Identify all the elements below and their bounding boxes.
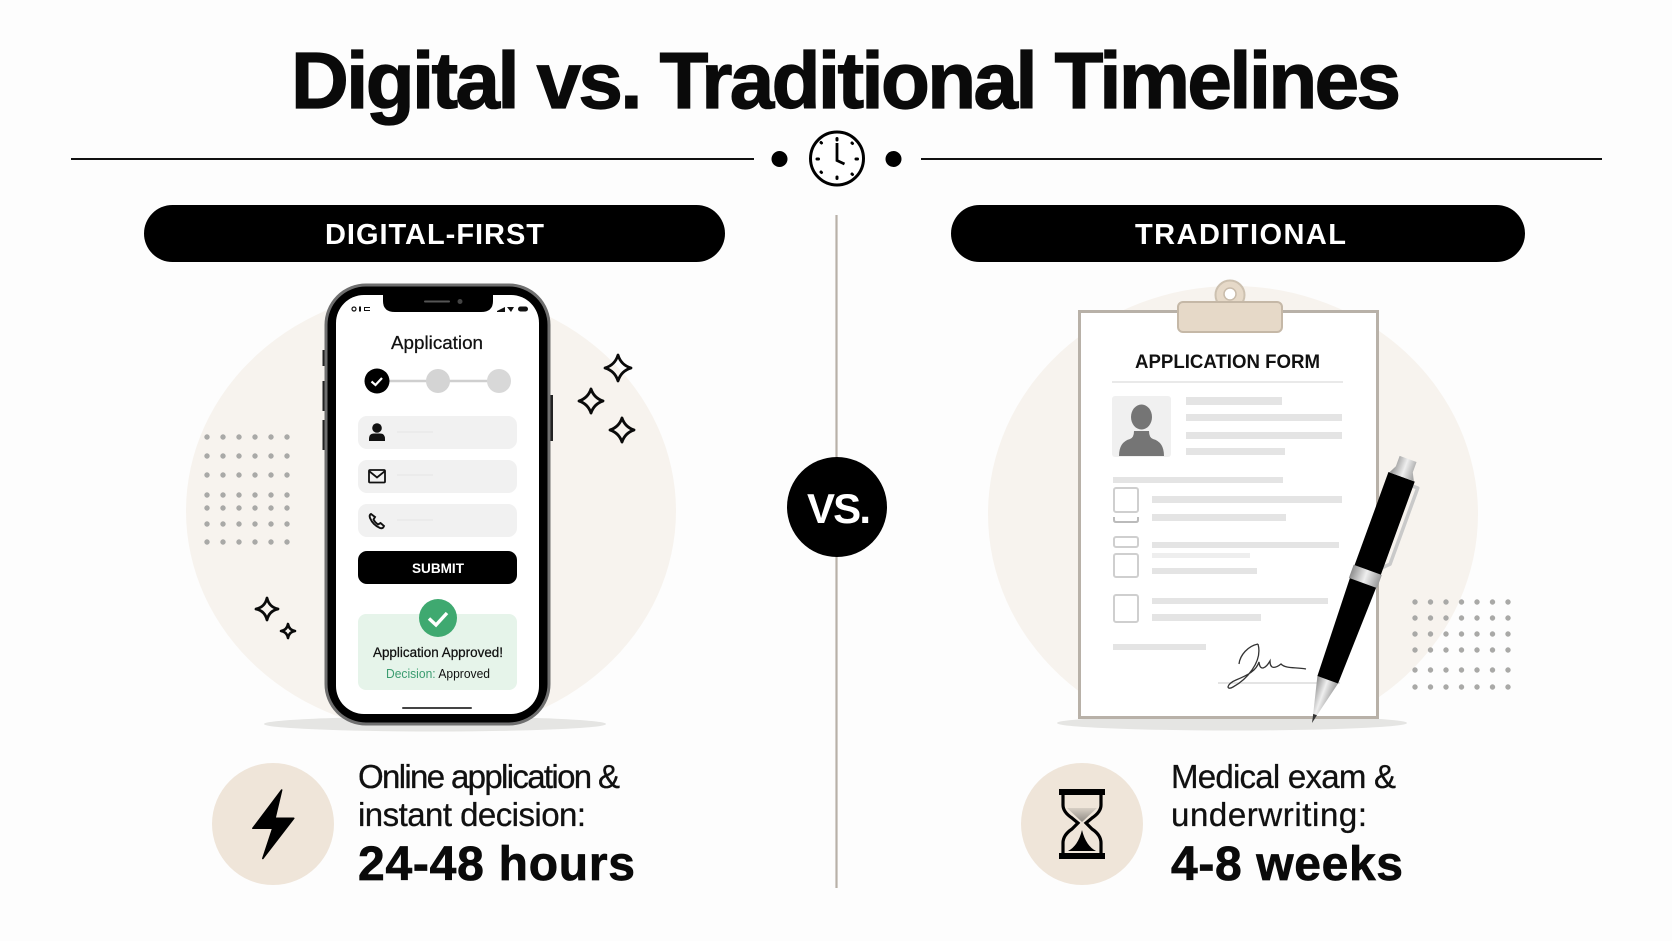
paper: [1080, 312, 1378, 718]
form title: APPLICATION FORM: [1135, 351, 1320, 373]
phone screen: [336, 295, 539, 714]
stat text: 4-8 weeks: [1171, 838, 1403, 891]
submit button: [358, 551, 517, 584]
clipboard form: [1080, 280, 1378, 718]
header divider with clock: [71, 132, 1602, 185]
notch speaker: [424, 299, 462, 304]
traditional heading pill: [951, 205, 1525, 262]
traditional heading pill: TRADITIONAL: [1135, 219, 1346, 251]
signature: [1218, 644, 1340, 688]
phone body: [326, 285, 549, 724]
center divider: [835, 215, 838, 888]
icon: lightning bolt: [212, 763, 334, 885]
ground shadow: [264, 716, 606, 732]
phone: [322, 285, 553, 724]
panel: digital-first: [144, 205, 725, 891]
stat: digital: [212, 758, 635, 891]
pen barrel: [1315, 472, 1415, 685]
stat text: Medical exam &: [1171, 758, 1396, 795]
submit button: SUBMIT: [412, 560, 464, 576]
vs badge: VS.: [807, 485, 871, 532]
title: Digital vs. Traditional Timelines: [291, 36, 1401, 125]
stat text: Online application &: [358, 758, 620, 795]
email field: [358, 460, 517, 493]
checkboxes: [1114, 488, 1138, 622]
pen: [1298, 454, 1426, 729]
stat text: [358, 758, 635, 891]
pen tip: [1302, 676, 1338, 727]
green check: [419, 599, 457, 637]
screen heading: Application: [391, 333, 483, 353]
phone field: [358, 504, 517, 537]
stat text: underwriting:: [1171, 796, 1367, 833]
photo placeholder: [1112, 396, 1171, 457]
icon: clock: [810, 132, 864, 185]
status icons: [352, 306, 528, 312]
stat text: [1171, 758, 1403, 891]
approval card: Application Approved!: [373, 645, 503, 660]
stat text: 24-48 hours: [358, 838, 635, 891]
pen band: [1349, 565, 1382, 588]
vs badge: [787, 457, 887, 557]
digital-first heading pill: DIGITAL-FIRST: [325, 219, 544, 251]
background circle: [186, 289, 676, 733]
stepper: [364, 368, 511, 394]
phone notch: [383, 295, 493, 312]
approval card: Decision: Approved: [386, 667, 490, 681]
pen top: [1389, 455, 1420, 481]
name field: [358, 416, 517, 449]
approval card: [358, 599, 517, 690]
text placeholder lines: [1113, 397, 1342, 650]
dot grid: [207, 437, 289, 542]
sparkles: [256, 355, 634, 638]
dot grid: [1415, 602, 1509, 687]
stat: traditional: [1021, 758, 1403, 891]
ground shadow: [1057, 716, 1407, 730]
digital-first heading pill: [144, 205, 725, 262]
phone side buttons: [322, 350, 553, 450]
clip: [1178, 280, 1282, 332]
background circle: [988, 286, 1478, 742]
pen clip: [1382, 486, 1418, 570]
icon: hourglass: [1021, 763, 1143, 885]
home bar: [402, 707, 472, 709]
stat text: instant decision:: [358, 796, 586, 833]
panel: traditional: [951, 205, 1525, 891]
